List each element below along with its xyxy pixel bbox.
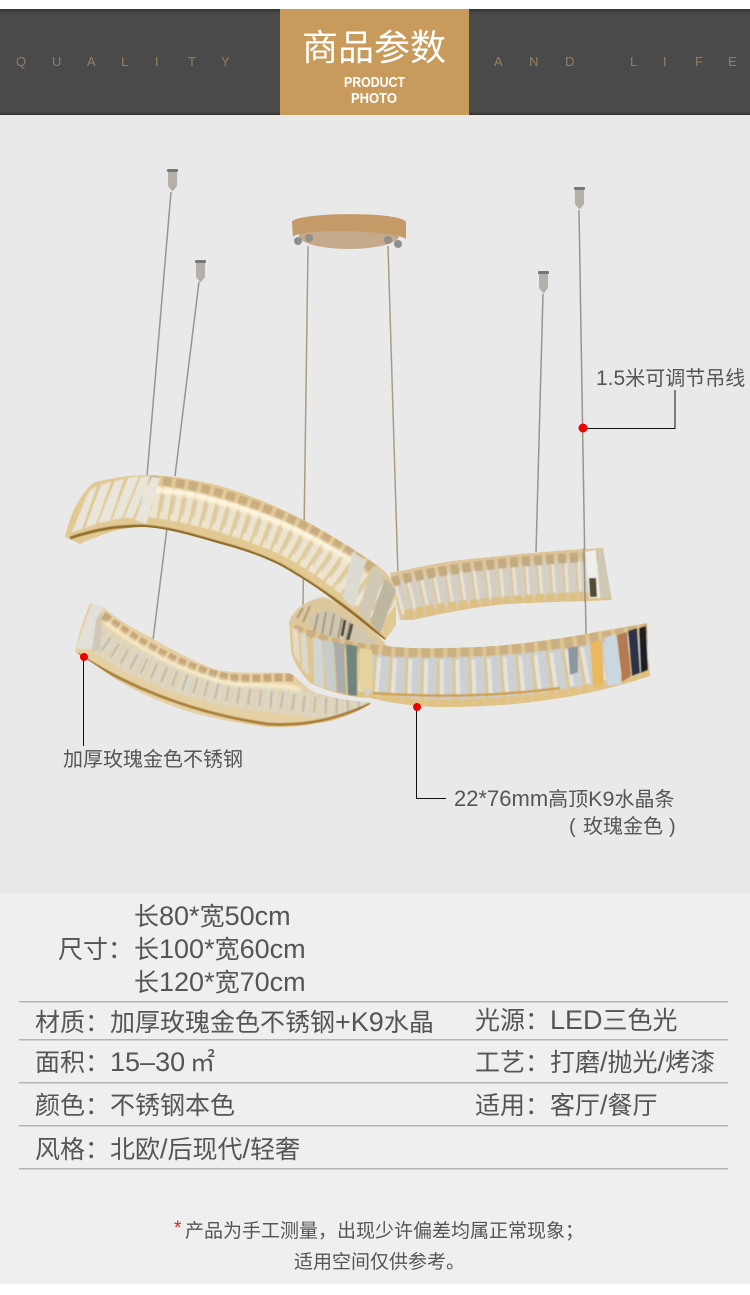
wire over upper right band: [584, 548, 585, 602]
heading: 商品参数: [302, 27, 446, 68]
wire cap 1: [167, 169, 178, 191]
tagline right: L: [630, 54, 637, 69]
ceiling canopy: [292, 214, 406, 249]
sub heading: PHOTO: [351, 90, 397, 107]
tagline right: D: [565, 54, 574, 69]
crystal band: back loop: [289, 597, 388, 647]
specification table: [19, 901, 728, 1170]
wire cap 4: [574, 187, 585, 209]
row: size: 长80*宽50cm: [134, 901, 291, 931]
footnote: 适用空间仅供参考。: [294, 1251, 465, 1273]
crystal band: upper right: [390, 548, 612, 620]
header gold block: [280, 9, 469, 115]
tagline left: I: [155, 54, 159, 69]
tagline left: Y: [221, 54, 230, 69]
tagline left: Q: [16, 54, 26, 69]
row: material: 材质：加厚玫瑰金色不锈钢+K9水晶: [35, 1007, 434, 1037]
tagline right: A: [494, 54, 503, 69]
row: size: [58, 901, 306, 997]
wire cap 2: [195, 260, 206, 282]
footnote: [174, 1218, 584, 1273]
red dot: [80, 653, 88, 661]
background: photo area: [0, 115, 750, 893]
tagline right: N: [529, 54, 538, 69]
row: area: 面积：15–30: [35, 1047, 185, 1077]
row: size: 长100*宽60cm: [134, 934, 306, 964]
red dot: [413, 703, 421, 711]
footnote: 产品为手工测量，出现少许偏差均属正常现象；: [185, 1220, 584, 1242]
footnote: *: [174, 1218, 182, 1239]
tagline left: T: [188, 54, 196, 69]
label: 1.5米可调节吊线: [596, 367, 745, 390]
crystal band: lower left: [75, 603, 372, 728]
tagline right: F: [695, 54, 703, 69]
red dot: [578, 424, 588, 432]
tagline left: A: [87, 54, 96, 69]
sub heading: PRODUCT: [344, 74, 405, 91]
row: light source: 光源：LED三色光: [475, 1005, 678, 1035]
crystal band: upper left: [60, 470, 400, 645]
label: 加厚玫瑰金色不锈钢: [63, 748, 243, 771]
row: usage: 适用：客厅/餐厅: [475, 1090, 658, 1120]
label line 1: 22*76mm高顶K9水晶条: [454, 786, 674, 811]
wire cap 3: [538, 271, 549, 293]
tagline right: [494, 54, 737, 69]
crystal band: lower right front: [289, 622, 650, 707]
label line 2: ): [669, 816, 676, 838]
label line 2: (: [569, 816, 576, 838]
row: color: 颜色：不锈钢本色: [35, 1092, 235, 1120]
tagline right: E: [728, 54, 737, 69]
suspension wires: [147, 192, 586, 640]
header banner: [0, 9, 750, 115]
background: specification area: [0, 893, 750, 1284]
tagline left: U: [52, 54, 61, 69]
row: style: 风格：北欧/后现代/轻奢: [35, 1134, 300, 1164]
callout: adjustable wire: [578, 367, 745, 432]
callout: crystal strip: [413, 703, 676, 838]
row: craft: 工艺：打磨/抛光/烤漆: [475, 1047, 715, 1077]
row: size: 长120*宽70cm: [134, 967, 306, 997]
row: size: 尺寸：: [58, 936, 133, 964]
sub heading: [344, 74, 405, 107]
tagline left: [16, 54, 230, 69]
row: area: ㎡: [190, 1049, 215, 1077]
row dividers: [19, 1001, 728, 1170]
tagline right: I: [663, 54, 667, 69]
label line 2: 玫瑰金色: [583, 815, 663, 838]
callout: stainless steel: [63, 653, 243, 771]
chandelier: [60, 169, 655, 735]
tagline left: L: [121, 54, 128, 69]
